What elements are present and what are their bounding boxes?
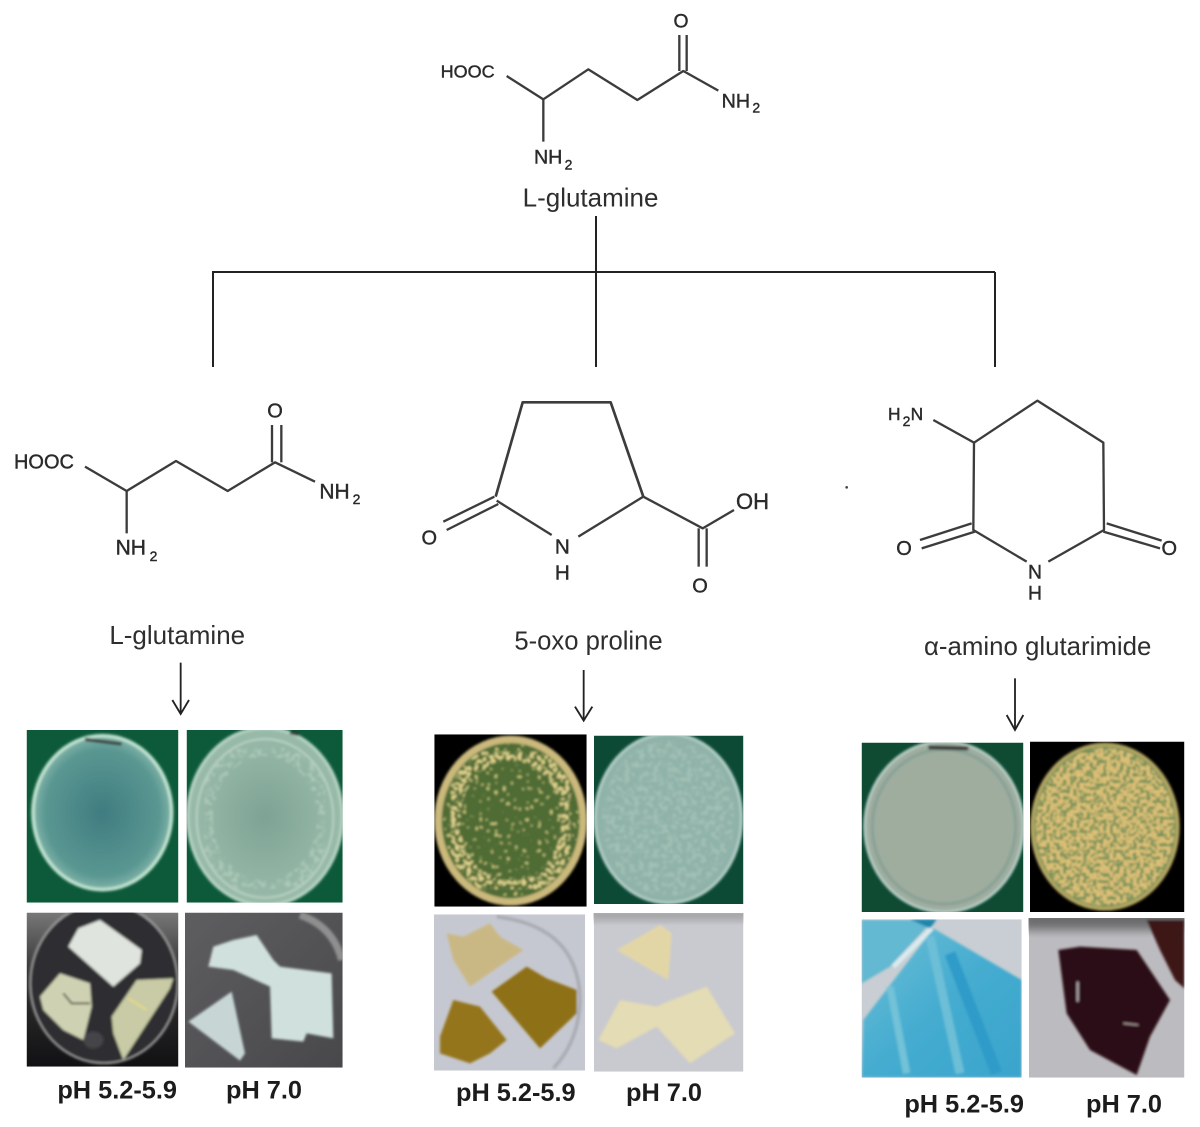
molecule: L-glutamine: NH	[319, 481, 350, 504]
column: alpha-amino glutarimide	[845, 401, 1177, 730]
results: alpha-amino glutarimide	[862, 741, 1192, 1118]
molecule: L-glutamine (top): 2	[752, 100, 760, 116]
photo: tissue pH 5.2-5.9	[434, 914, 585, 1070]
molecule: alpha-amino glutarimide: 2	[903, 413, 911, 429]
arrow down	[172, 663, 189, 714]
molecule: L-glutamine: 2	[353, 491, 361, 507]
photo: tissue pH 5.2-5.9	[26, 912, 178, 1067]
molecule: alpha-amino glutarimide	[845, 401, 1177, 604]
label: pH 7.0: pH 7.0	[226, 1076, 302, 1104]
molecule: L-glutamine (top)	[441, 12, 760, 172]
molecule: 5-oxo proline: O	[422, 527, 437, 549]
molecule: 5-oxo proline: OH	[736, 489, 769, 514]
label: alpha-amino glutarimide: α-amino glutarimide	[924, 633, 1151, 661]
arrow down	[1007, 678, 1023, 730]
molecule: L-glutamine: NH	[116, 536, 146, 559]
molecule: 5-oxo proline: O	[692, 576, 708, 598]
molecule: L-glutamine (top): NH	[534, 146, 562, 168]
results: L-glutamine	[27, 728, 343, 1104]
molecule: alpha-amino glutarimide: O	[1162, 538, 1177, 560]
photo: plate pH 5.2-5.9	[862, 742, 1024, 912]
molecule: alpha-amino glutarimide: O	[896, 538, 912, 560]
molecule: 5-oxo proline	[422, 402, 769, 598]
molecule: L-glutamine (top): HOOC	[441, 62, 495, 82]
molecule: alpha-amino glutarimide: N	[911, 404, 923, 424]
photo: tissue pH 7.0	[594, 913, 744, 1072]
column: 5-oxo proline	[422, 402, 769, 721]
title: L-glutamine: L-glutamine	[523, 183, 658, 213]
arrow down	[575, 670, 592, 721]
label: pH 5.2-5.9: pH 5.2-5.9	[904, 1090, 1024, 1118]
molecule: 5-oxo proline: H	[555, 561, 570, 584]
label: pH 5.2-5.9: pH 5.2-5.9	[57, 1076, 177, 1104]
molecule: alpha-amino glutarimide: H	[888, 404, 901, 424]
molecule: L-glutamine (top): NH	[722, 90, 750, 112]
label: L-glutamine: L-glutamine	[109, 620, 245, 650]
molecule: 5-oxo proline: N	[555, 535, 570, 558]
molecule: L-glutamine	[14, 400, 361, 564]
photo: plate pH 7.0	[186, 730, 343, 903]
column: L-glutamine	[14, 400, 361, 714]
photo: plate pH 7.0	[1030, 742, 1184, 912]
molecule: alpha-amino glutarimide: H	[1028, 583, 1042, 604]
label: pH 5.2-5.9: pH 5.2-5.9	[456, 1079, 576, 1107]
photo: plate pH 7.0	[594, 736, 744, 904]
molecule: L-glutamine: O	[267, 400, 283, 422]
molecule: L-glutamine: 2	[150, 548, 158, 564]
photo: tissue pH 5.2-5.9	[862, 919, 1022, 1078]
molecule: L-glutamine: HOOC	[14, 451, 74, 473]
molecule: alpha-amino glutarimide: N	[1028, 562, 1042, 583]
molecule: L-glutamine (top): 2	[565, 156, 573, 172]
molecule: L-glutamine (top): O	[673, 12, 689, 33]
label: pH 7.0: pH 7.0	[626, 1079, 702, 1107]
photo: plate pH 5.2-5.9	[434, 734, 587, 907]
results: 5-oxo proline	[434, 734, 750, 1107]
branching connector lines	[212, 216, 995, 367]
photo: plate pH 5.2-5.9	[26, 730, 178, 903]
label: 5-oxo proline: 5-oxo proline	[514, 627, 663, 655]
photo: tissue pH 7.0	[1028, 918, 1184, 1078]
label: pH 7.0: pH 7.0	[1086, 1090, 1162, 1118]
photo: tissue pH 7.0	[185, 912, 343, 1068]
